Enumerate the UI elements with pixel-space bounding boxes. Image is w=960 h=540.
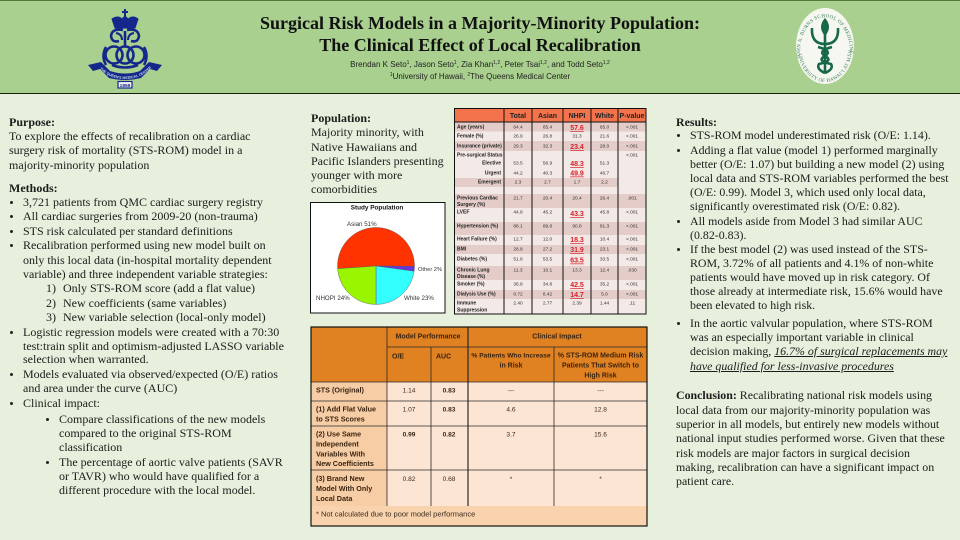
table: model performance and clinical impact: Independent [316, 440, 359, 448]
slice: Other 2% [376, 266, 414, 271]
table: patient characteristics: 65.4 [543, 124, 552, 130]
table: patient characteristics: 20.4 [572, 196, 582, 202]
table: patient characteristics: NHPI [569, 113, 585, 120]
table: patient characteristics: 42.5 [570, 282, 584, 289]
heading: population: Population: [311, 111, 371, 125]
table: model performance and clinical impact: * [599, 476, 602, 483]
panel: results: been elevated to high risk. [690, 298, 815, 312]
table: patient characteristics: 64.4 [513, 124, 523, 130]
table: model performance and clinical impact: * Not calculated due to poor model performance [316, 510, 475, 518]
table: patient characteristics: 81.3 [600, 224, 609, 230]
table: patient characteristics: <.001 [626, 224, 638, 230]
table: patient characteristics: 45.8 [600, 210, 609, 216]
panel: results: better (O/E: 1.07) but building a new model (2) using [690, 157, 944, 171]
table: patient characteristics: 27.2 [543, 246, 552, 252]
panel: conclusion: superior in all models, but entirely new models without [676, 417, 939, 431]
table: model performance and clinical impact: (2) Use Same [316, 430, 361, 438]
table: patient characteristics: 28.8 [513, 246, 523, 252]
table: patient characteristics: 63.5 [570, 258, 584, 264]
table: patient characteristics: 51.3 [600, 160, 609, 166]
panel: purpose: majority-minority population [9, 158, 149, 172]
table: model performance and clinical impact: 1.14 [403, 388, 416, 394]
pie chart: study population [310, 202, 446, 314]
table: model performance and clinical impact: 4.6 [506, 406, 516, 414]
table: model performance and clinical impact: 0.83 [443, 388, 456, 394]
table: patient characteristics: 1.7 [574, 180, 581, 186]
title: Surgical Risk Models in a Majority-Minority Population: [260, 13, 700, 33]
table: model performance and clinical impact: 15.6 [594, 432, 607, 438]
table: patient characteristics: 2.40 [513, 300, 523, 306]
table: patient characteristics: Immune [457, 300, 476, 306]
table: patient characteristics: 46.7 [600, 170, 609, 176]
table: patient characteristics [454, 108, 646, 314]
table: model performance and clinical impact: 12.8 [594, 406, 607, 414]
table: patient characteristics: <.001 [626, 282, 638, 288]
table: patient characteristics: 65.0 [600, 124, 609, 130]
table: model performance and clinical impact: (1) Add Flat Value [316, 404, 376, 414]
table: patient characteristics: 51.8 [513, 256, 523, 262]
table: patient characteristics: 33.5 [600, 256, 609, 262]
panel: results: significantly overestimated risk (O/E: 0.82). [690, 199, 900, 213]
slice: Asian 51% [338, 227, 415, 269]
table: model performance and clinical impact: Model With Only [316, 484, 372, 493]
table: patient characteristics: 13.3 [572, 268, 582, 274]
panel: results: patients would have moved up in risk category. Of [690, 270, 930, 284]
table: patient characteristics: 20.4 [543, 196, 552, 202]
panel: results: (O/E: 0.99). Model 3, which used only local data, [690, 185, 926, 199]
table: model performance and clinical impact: to STS Scores [316, 414, 365, 424]
table: patient characteristics: .030 [627, 268, 637, 274]
panel: methods: Logistic regression models were created with a 70:30 [23, 325, 279, 339]
panel: purpose: To explore the effects of recalibration on a cardiac [9, 129, 250, 143]
table: patient characteristics: Total [510, 113, 526, 120]
table: patient characteristics: 11.3 [514, 268, 523, 274]
table: patient characteristics: Previous Cardiac [457, 196, 498, 202]
table: patient characteristics: 49.9 [570, 170, 584, 178]
panel: results: (0.82-0.83). [690, 228, 746, 242]
panel: methods: 3) [46, 310, 56, 324]
table: patient characteristics: 2.77 [543, 300, 552, 306]
table: model performance and clinical impact: New Coefficients [316, 459, 374, 468]
heading: methods: Methods: [9, 181, 58, 195]
table: patient characteristics: 89.8 [543, 224, 552, 230]
table: patient characteristics: 32.3 [543, 144, 552, 150]
panel: methods: New coefficients (same variables) [63, 296, 226, 310]
table: patient characteristics: Chronic Lung [457, 268, 490, 274]
panel: methods: New variable selection (local-only model) [63, 310, 266, 324]
panel: methods: only this local data (in-hospital mortality dependent [23, 253, 272, 267]
table: patient characteristics: 88.1 [513, 224, 523, 230]
panel: methods: 2) [46, 296, 56, 310]
pie chart: study population: Study Population [351, 204, 403, 212]
table: model performance and clinical impact: --- [597, 388, 604, 394]
table: patient characteristics: Hypertension (%) [457, 224, 498, 230]
panel: conclusion: making, recalibration can have a significant impact on [676, 460, 934, 474]
table: model performance and clinical impact: 0.83 [443, 406, 456, 414]
table: patient characteristics: <.001 [626, 246, 638, 252]
table: patient characteristics: 34.8 [543, 282, 552, 288]
panel: population: Pacific Islanders presenting [311, 154, 444, 168]
panel: purpose [9, 115, 250, 172]
table: model performance and clinical impact: Variables With [316, 450, 365, 458]
table: patient characteristics: 2.2 [601, 180, 608, 186]
table: patient characteristics: 40.3 [543, 170, 552, 176]
table: patient characteristics: 21.6 [600, 134, 609, 140]
table: model performance and clinical impact: --- [508, 388, 514, 394]
authors and affiliations: 1University of Hawaii, 2The Queens Medical Center [390, 72, 570, 81]
panel: results: have qualified for less-invasive procedures [690, 359, 894, 373]
panel: population: comorbidities [311, 182, 377, 196]
table: patient characteristics: BMI [457, 246, 467, 252]
table: patient characteristics: 26.4 [600, 196, 609, 202]
table: model performance and clinical impact: in Risk [500, 362, 523, 370]
pie chart: study population: White 23% [404, 295, 434, 302]
table: patient characteristics: 31.3 [572, 134, 582, 140]
panel: methods: 1) [46, 281, 56, 295]
panel: purpose: surgery risk of mortality (STS-ROM) model in a [9, 143, 242, 157]
panel: population: younger with more [311, 168, 402, 182]
table: patient characteristics: Emergent [478, 180, 501, 186]
table: model performance and clinical impact: (3) Brand New [316, 474, 365, 483]
table: patient characteristics: LVEF [457, 210, 469, 216]
table: patient characteristics: <.001 [626, 152, 638, 158]
panel: conclusion: national input studies performed worse. Given that these [676, 431, 945, 445]
table: model performance and clinical impact: 3.7 [506, 432, 516, 438]
table: patient characteristics: Disease (%) [457, 274, 485, 280]
panel: population: Majority minority, with [311, 125, 424, 139]
heading: purpose: Purpose: [9, 115, 55, 129]
panel: results: In the aortic valvular population, where STS-ROM [690, 316, 933, 330]
panel: methods: different procedure with the local model. [59, 483, 255, 497]
table: patient characteristics: 5.0 [601, 292, 608, 298]
pie chart: study population: NHOPI 24% [316, 295, 350, 302]
table: patient characteristics: Dialysis Use (%) [457, 292, 496, 298]
table: patient characteristics: 29.3 [513, 144, 523, 150]
panel: methods: All cardiac surgeries from 2009-20 (non-trauma) [23, 209, 258, 223]
table: patient characteristics: Heart Failure (%) [457, 236, 497, 242]
table: patient characteristics: Diabetes (%) [457, 256, 487, 262]
table: patient characteristics: 10.1 [543, 268, 552, 274]
panel: methods: Models evaluated via observed/expected (O/E) ratios [23, 367, 278, 381]
panel: results [676, 115, 949, 373]
table: patient characteristics: 12.4 [600, 268, 609, 274]
table: patient characteristics: Asian [538, 113, 557, 120]
table: patient characteristics: Urgent [485, 170, 501, 176]
table: model performance and clinical impact: Model Performance [396, 334, 461, 340]
slice: White 23% [376, 266, 414, 304]
panel: conclusion: risk models are major factors in surgical decision [676, 446, 910, 460]
table: patient characteristics: <.001 [626, 124, 638, 130]
table: patient characteristics: <.001 [626, 256, 638, 262]
table: patient characteristics: 43.3 [570, 211, 584, 218]
panel: methods: classification [59, 440, 122, 454]
table: patient characteristics: 2.39 [572, 300, 582, 306]
table: patient characteristics: 57.6 [570, 125, 584, 132]
panel: methods: Clinical impact: [23, 396, 100, 410]
title [260, 13, 700, 55]
table: patient characteristics: Age (years) [457, 124, 485, 130]
table: patient characteristics: White [595, 113, 614, 120]
icon: medical school seal: JOHN A. BURNS SCHOOL OF MEDICINE [796, 14, 854, 58]
table: patient characteristics: 53.5 [513, 160, 523, 166]
panel: methods: The percentage of aortic valve patients (SAVR [59, 455, 283, 469]
pie chart: study population: Other 2% [418, 267, 442, 273]
table: patient characteristics: 90.8 [572, 224, 582, 230]
table: patient characteristics: 21.7 [513, 196, 523, 202]
table: patient characteristics: 26.9 [513, 134, 523, 140]
panel: conclusion: Conclusion: Recalibrating national risk models using [676, 388, 932, 402]
table: patient characteristics: Elective [482, 160, 501, 166]
table: patient characteristics: 10.4 [600, 236, 609, 242]
table: patient characteristics: P-value [620, 113, 645, 120]
panel: methods: or TAVR) who would have qualified for a [59, 469, 259, 483]
table: patient characteristics: 2.7 [544, 180, 551, 186]
table: patient characteristics: Pre-surgical Status [457, 152, 503, 158]
icon: Queen's Medical Center crest [88, 9, 162, 89]
authors and affiliations [350, 60, 610, 81]
table: patient characteristics: 12.7 [513, 236, 523, 242]
table: model performance and clinical impact: Clinical Impact [532, 334, 582, 340]
table: patient characteristics: 26.8 [543, 134, 552, 140]
panel: methods: and area under the curve (AUC) [23, 381, 177, 395]
table: model performance and clinical impact: 0.68 [443, 476, 456, 483]
table: patient characteristics: .001 [627, 196, 637, 202]
title: The Clinical Effect of Local Recalibration [319, 35, 641, 55]
panel: methods: Compare classifications of the new models [59, 412, 265, 426]
panel: results: Adding a flat value (model 1) performed marginally [690, 143, 938, 157]
table: patient characteristics: .11 [629, 300, 635, 306]
panel: population: Native Hawaiians and [311, 140, 417, 154]
icon: Queen's Medical Center crest: 1859 [120, 83, 131, 89]
header banner [0, 0, 960, 94]
panel: methods: Recalibration performed using new model built on [23, 238, 266, 252]
table: model performance and clinical impact: STS (Original) [316, 386, 365, 394]
panel: methods: selection when warranted. [23, 352, 149, 366]
icon: medical school seal [796, 8, 854, 84]
table: patient characteristics: <.001 [626, 144, 638, 150]
table: patient characteristics: 48.3 [570, 161, 584, 168]
table: patient characteristics: 12.0 [543, 236, 552, 242]
panel: methods: test:train split and optimism-adjusted LASSO variable [23, 339, 284, 353]
panel: conclusion: local data from our majority-minority population was [676, 403, 930, 417]
table: patient characteristics: 53.5 [543, 256, 552, 262]
table: model performance and clinical impact: O/E [392, 354, 404, 360]
table: patient characteristics: <.001 [626, 292, 638, 298]
table: model performance and clinical impact: Local Data [316, 494, 353, 503]
table: patient characteristics: <.001 [626, 134, 638, 140]
table: patient characteristics: 2.3 [515, 180, 522, 186]
table: model performance and clinical impact: * [510, 476, 513, 483]
heading: results: Results: [676, 115, 717, 129]
table: patient characteristics: 1.44 [600, 300, 609, 306]
table: patient characteristics: Surgery (%) [457, 202, 485, 208]
panel: results: decision making, 16.7% of surgical replacements may [690, 344, 947, 358]
panel: results: If the best model (2) was used instead of the STS- [690, 242, 928, 256]
panel: methods: Only STS-ROM score (add a flat value) [63, 281, 255, 295]
panel: population [311, 111, 444, 196]
table: model performance and clinical impact: High Risk [584, 372, 617, 380]
table: patient characteristics: 18.3 [570, 237, 584, 244]
table: model performance and clinical impact: % Patients Who Increase [471, 352, 551, 360]
table: patient characteristics: Smoker (%) [457, 282, 485, 288]
table: patient characteristics: 45.2 [543, 210, 552, 216]
table: patient characteristics: 36.8 [513, 282, 523, 288]
table: model performance and clinical impact: 0.82 [403, 476, 416, 483]
panel: results: STS-ROM model underestimated risk (O/E: 1.14). [690, 128, 931, 142]
icon: Queen's Medical Center crest: THE QUEEN'S MEDICAL CENTER [100, 66, 152, 80]
table: model performance and clinical impact: Patients That Switch to [562, 362, 639, 370]
panel: results: those already at intermediate risk, 15.6% would have [690, 284, 943, 298]
table: model performance and clinical impact: 1.07 [403, 406, 416, 414]
panel: conclusion: patient care. [676, 474, 734, 488]
table: patient characteristics: 8.72 [513, 292, 523, 298]
table: model performance and clinical impact: AUC [436, 354, 451, 360]
pie chart: study population: Asian 51% [347, 221, 377, 228]
panel: results: ROM, 3.72% of all patients and 4.1% of non-white [690, 256, 933, 270]
table: patient characteristics: 31.9 [570, 247, 584, 254]
table: patient characteristics: Suppression [457, 308, 487, 314]
table: patient characteristics: 56.9 [543, 160, 552, 166]
panel: methods: 3,721 patients from QMC cardiac surgery registry [23, 195, 263, 209]
table: model performance and clinical impact: 0.82 [443, 432, 456, 438]
table: patient characteristics: <.001 [626, 210, 638, 216]
panel: methods: STS risk calculated per standard definitions [23, 224, 233, 238]
table: patient characteristics: Insurance (private) [457, 144, 502, 150]
table: patient characteristics: <.001 [626, 236, 638, 242]
panel: methods: compared to the original STS-ROM [59, 426, 232, 440]
panel: methods: variable) and three independent variable strategies: [23, 267, 268, 281]
slice: NHOPI 24% [338, 266, 376, 304]
table: patient characteristics: 44.2 [513, 170, 523, 176]
panel: results: was an especially important variable in clinical [690, 330, 914, 344]
table: patient characteristics: 44.8 [513, 210, 523, 216]
authors and affiliations: Brendan K Seto1, Jason Seto1, Zia Khan1,2, Peter Tsai1,2, and Todd Seto1,2 [350, 60, 610, 69]
table: patient characteristics: 23.1 [600, 246, 609, 252]
table: model performance and clinical impact [310, 326, 648, 527]
panel: methods [9, 181, 284, 497]
table: patient characteristics: 28.0 [600, 144, 609, 150]
panel: conclusion [676, 388, 945, 488]
table: patient characteristics: Female (%) [457, 134, 484, 140]
table: patient characteristics: 23.4 [570, 144, 584, 151]
table: model performance and clinical impact: 0.99 [403, 432, 416, 438]
table: patient characteristics: 8.42 [543, 292, 552, 298]
panel: results: local data and STS-ROM variables performed the best [690, 171, 949, 185]
table: patient characteristics: 35.2 [600, 282, 609, 288]
table: patient characteristics: 14.7 [570, 292, 584, 299]
panel: results: All models aside from Model 3 had similar AUC [690, 214, 922, 228]
table: model performance and clinical impact: % STS-ROM Medium Risk [558, 352, 643, 360]
